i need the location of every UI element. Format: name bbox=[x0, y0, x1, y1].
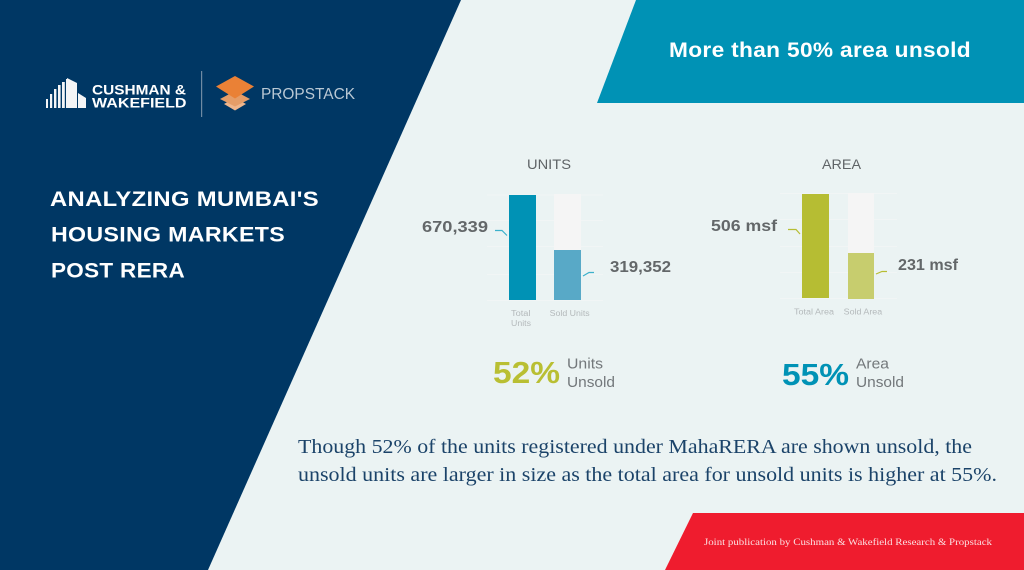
icon: building bbox=[46, 78, 86, 108]
chart heading: AREA bbox=[822, 157, 861, 172]
axis labels: Total bbox=[511, 309, 531, 318]
bar: total area bbox=[802, 194, 829, 298]
icon: stacked layers bbox=[216, 76, 254, 110]
value: sold area: 231 msf bbox=[898, 257, 959, 274]
title: HOUSING MARKETS bbox=[51, 224, 285, 247]
stat label: Unsold bbox=[856, 375, 904, 391]
bar: total units bbox=[509, 195, 536, 300]
logo wordmark: PROPSTACK bbox=[261, 86, 356, 103]
axis labels bbox=[511, 309, 590, 328]
text block: summary bbox=[298, 436, 997, 486]
text block: summary: unsold units are larger in size as the total area for unsold units is higher at 55%. bbox=[298, 464, 997, 486]
title bbox=[50, 188, 319, 283]
axis labels: Sold Area bbox=[844, 308, 883, 316]
logo: Propstack bbox=[216, 76, 356, 110]
chart: area bbox=[711, 157, 959, 316]
stat: 52% units unsold bbox=[493, 355, 615, 391]
text block: summary: Though 52% of the units registered under MahaRERA are shown unsold, the bbox=[298, 436, 972, 458]
bar: sold area bbox=[848, 253, 874, 299]
axis labels: Units bbox=[511, 319, 531, 328]
axis labels: Sold Units bbox=[550, 309, 590, 318]
value: total units: 670,339 bbox=[422, 219, 488, 236]
stat label: Area bbox=[856, 356, 890, 372]
chart: units bbox=[422, 157, 671, 328]
value: total area: 506 msf bbox=[711, 218, 778, 235]
panel: navy title panel bbox=[0, 0, 461, 570]
logo wordmark: WAKEFIELD bbox=[92, 96, 187, 111]
bar: sold units bbox=[554, 250, 581, 300]
stat label bbox=[567, 356, 615, 391]
banner: teal headline bbox=[597, 0, 1024, 103]
title: ANALYZING MUMBAI'S bbox=[50, 188, 319, 211]
value: sold units: 319,352 bbox=[610, 259, 671, 276]
axis labels: Total Area bbox=[794, 308, 835, 316]
footer text: Joint publication by Cushman & Wakefield Research & Propstack bbox=[704, 537, 992, 548]
logo: Cushman & Wakefield bbox=[46, 78, 187, 111]
stat: 55% area unsold: 55% bbox=[782, 357, 849, 392]
stat label: Units bbox=[567, 356, 603, 372]
banner text: More than 50% area unsold bbox=[669, 38, 971, 62]
axis labels bbox=[794, 308, 883, 316]
stat: 55% area unsold bbox=[782, 356, 904, 392]
stat label: Unsold bbox=[567, 375, 615, 391]
logo wordmark bbox=[92, 82, 187, 111]
chart heading: UNITS bbox=[527, 157, 571, 172]
stat label bbox=[856, 356, 904, 391]
title: POST RERA bbox=[51, 260, 185, 283]
logo wordmark: CUSHMAN & bbox=[92, 82, 186, 98]
stat: 52% units unsold: 52% bbox=[493, 355, 560, 390]
footer: red credit banner bbox=[665, 513, 1024, 570]
